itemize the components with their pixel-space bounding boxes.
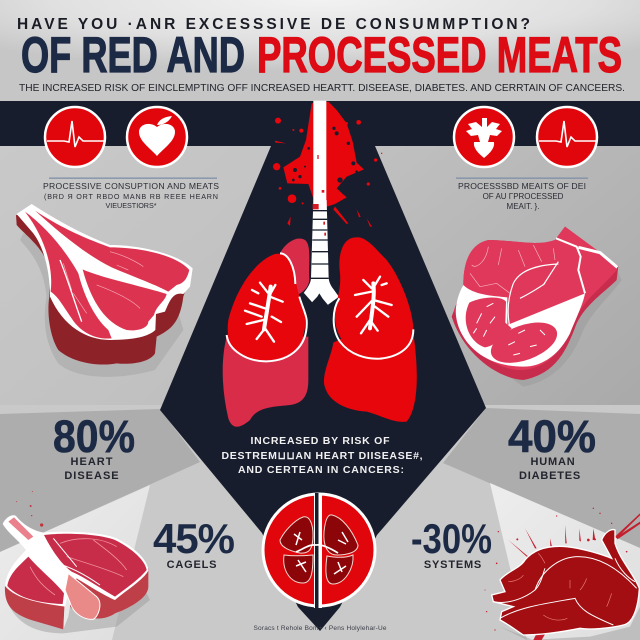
left text block: (BRD Я ORT RBDO MANB RB REEE HEARN <box>44 192 218 201</box>
meat: top right cut <box>452 227 622 387</box>
center statement: AND CERTEAN IN CANCERS: <box>238 464 404 476</box>
meat: top left steak <box>16 204 193 377</box>
source note: Soracs t Rehole Bom+ ‹ Pens Holylehar-Ue <box>254 625 387 632</box>
meat: bottom right roast <box>484 508 640 640</box>
left text block: PROCESSIVE CONSUPTION AND MEATS <box>43 181 219 191</box>
right text block: MEAIT. }. <box>507 202 539 211</box>
main title: OF RED AND <box>21 27 245 83</box>
center statement: INCREASED BY RISK OF <box>250 435 390 447</box>
center statement: DESTREM⊔⊔AN HEART DIISEASE#, <box>222 450 423 462</box>
title block <box>17 16 625 94</box>
center statement <box>222 435 423 476</box>
right text block: OF AU ΓPROCESSED <box>483 192 564 201</box>
stat: 30% systems: SYSTEMS <box>424 559 482 571</box>
left lung <box>223 239 309 427</box>
stat: 40% human diabetes: HUMAN <box>531 456 575 468</box>
stat: 80% heart disease: DISEASE <box>64 470 120 482</box>
stat: 40% human diabetes: DIABETES <box>519 470 581 482</box>
bronchial tree left <box>245 283 283 342</box>
blood splatter <box>273 102 382 227</box>
left text block <box>43 178 219 210</box>
main title <box>21 27 622 83</box>
bronchial tree right <box>355 277 392 333</box>
stat: 30% systems: -30% <box>411 515 492 562</box>
heading line: HAVE YOU ·ANR EXCESSSIVE DE CONSUMMPTION? <box>17 16 530 33</box>
stat: 40% human diabetes: 40% <box>508 411 596 462</box>
stat: 80% heart disease: HEART <box>71 456 113 468</box>
lungs <box>223 237 417 427</box>
stat: 80% heart disease: 80% <box>53 411 135 462</box>
icon: heartbeat left <box>45 107 105 167</box>
icon: apple heart <box>127 107 187 167</box>
icon: heartbeat right <box>537 107 597 167</box>
meat: bottom left steak <box>3 491 150 633</box>
stat: 45% cagels: 45% <box>153 515 235 562</box>
subtitle: THE INCREASED RISK OF EINCLEMPTING OFF INCREASED HEARTT. DISEEASE, DIABETES. AND CERRTAIN OF CANCEERS. <box>19 83 625 94</box>
right text block: PROCESSSBD MEAITS OF DEI <box>458 181 586 191</box>
trachea <box>303 101 339 305</box>
stat: 80% heart disease <box>53 411 135 482</box>
bottom lungs circle <box>263 493 375 608</box>
stat: 45% cagels: CAGELS <box>167 559 217 571</box>
right lung <box>324 237 417 422</box>
right text block <box>456 178 588 211</box>
left text block: VIEUESTIORS* <box>105 201 157 210</box>
icon: organ heart <box>454 107 514 167</box>
